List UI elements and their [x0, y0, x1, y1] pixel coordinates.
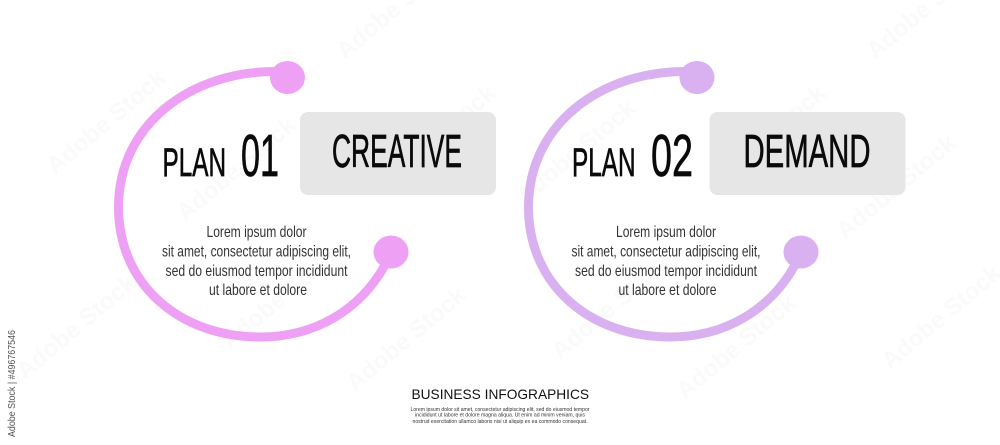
footer title: BUSINESS INFOGRAPHICS [412, 386, 589, 402]
text block: plan 02: ut labore et dolore [618, 282, 717, 299]
heading: plan 02 [572, 123, 693, 189]
top dot: plan 02 [680, 61, 714, 94]
curved ring: plan 02 [528, 72, 795, 337]
stock id side label: Adobe Stock | #496767546 [6, 330, 18, 437]
curved ring: plan 01 [118, 72, 385, 337]
watermark pattern: Adobe Stock [512, 94, 642, 210]
text block: plan 02: Lorem ipsum dolor [616, 224, 717, 241]
watermark pattern: Adobe Stock [372, 79, 502, 195]
watermark pattern: Adobe Stock [342, 281, 472, 397]
panel: plan 02 [528, 61, 906, 337]
text block: plan 01: ut labore et dolore [209, 282, 307, 299]
footer text block: Lorem ipsum dolor sit amet, consectetur adipiscing elit, sed do eiusmod tempor [410, 407, 590, 413]
footer text block [410, 407, 590, 425]
panel: plan 01 [118, 61, 496, 337]
watermark pattern: Adobe Stock [42, 64, 172, 180]
watermark pattern: Adobe Stock [12, 269, 142, 385]
heading: plan 02: 02 [651, 123, 693, 189]
watermark pattern: Adobe Stock [672, 289, 802, 405]
heading: plan 02: PLAN [572, 141, 636, 185]
watermark pattern: Adobe Stock [217, 239, 347, 355]
heading: plan 01: 01 [241, 123, 279, 189]
heading: plan 01: PLAN [162, 141, 226, 185]
bottom dot: plan 01 [374, 236, 408, 268]
watermark pattern: Adobe Stock [172, 111, 302, 227]
label box: creative: CREATIVE [332, 125, 462, 177]
bottom dot: plan 02 [784, 236, 818, 268]
footer text block: nostrud exercitation ullamco laboris nisi ut aliquip ex ea commodo consequat. [412, 419, 588, 425]
heading: plan 01 [162, 123, 279, 189]
text block: plan 02: sit amet, consectetur adipiscing elit, [572, 244, 760, 260]
label box: demand [710, 112, 906, 195]
text block: plan 02: sed do eiusmod tempor incididunt [575, 263, 757, 280]
watermark pattern: Adobe Stock [547, 249, 677, 365]
footer text block: incididunt ut labore et dolore magna aliqua. Ut enim ad minim veniam, quis [415, 412, 585, 418]
label box: demand: DEMAND [744, 125, 870, 177]
text block: plan 02 [572, 224, 760, 299]
text block: plan 01 [162, 224, 351, 299]
label box: creative [300, 112, 496, 195]
text block: plan 01: sed do eiusmod tempor incididunt [166, 263, 348, 280]
watermark pattern: Adobe Stock [702, 79, 832, 195]
watermark pattern: Adobe Stock [832, 129, 962, 245]
top dot: plan 01 [270, 61, 305, 94]
text block: plan 01: sit amet, consectetur adipiscing elit, [162, 244, 351, 260]
text block: plan 01: Lorem ipsum dolor [206, 224, 307, 241]
